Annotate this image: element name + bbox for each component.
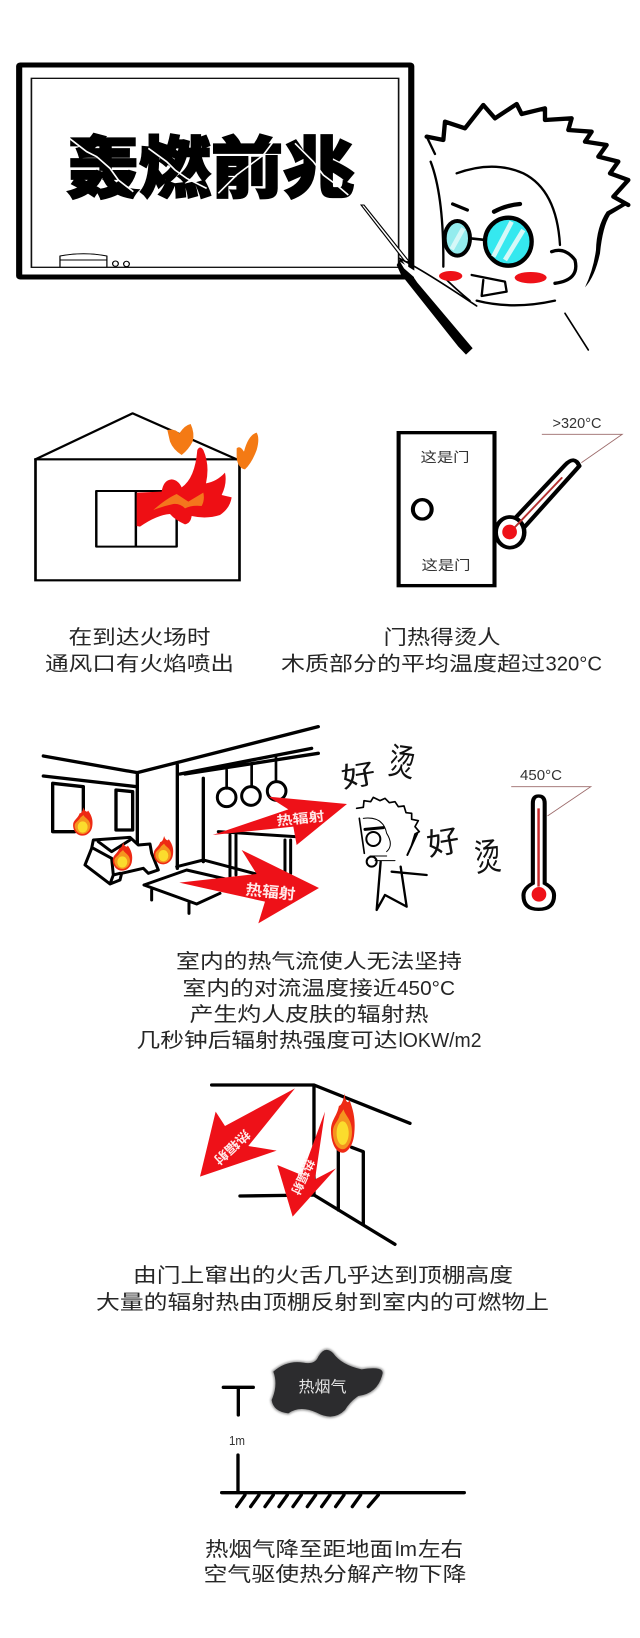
smoke diagram [222, 1350, 464, 1507]
smoke label: 热烟气 [298, 1378, 346, 1396]
door text: 这是门 [420, 449, 470, 465]
thermometer 320 [496, 434, 622, 548]
arrow label left: 热辐射 [210, 1127, 253, 1168]
caption: ceiling: 大量的辐射热由顶棚反射到室内的可燃物上 [96, 1291, 549, 1314]
blush [439, 271, 547, 283]
caption: door: 木质部分的平均温度超过 [281, 652, 545, 676]
arrow: reflected radiation right [277, 1112, 336, 1217]
orange flame top [167, 424, 193, 455]
arrow label lower: 热辐射 [245, 880, 296, 904]
arrow label right: 热辐射 [288, 1157, 318, 1197]
1m label: 1m [229, 1433, 245, 1448]
title: 轰燃前兆 [67, 132, 355, 207]
hair side [585, 202, 629, 287]
window [96, 491, 177, 547]
label >320C: >320°C [552, 416, 602, 432]
ground [222, 1493, 464, 1507]
house [35, 413, 239, 580]
caption: radiant heat: 产生灼人皮肤的辐射热 [190, 1003, 428, 1026]
hot exclamation top: 烫 [386, 740, 418, 785]
room on fire [43, 727, 347, 923]
orange flame right [237, 433, 258, 469]
caption: vents [45, 626, 234, 676]
ear [552, 250, 576, 283]
flame [154, 836, 173, 864]
hot exclamation bottom [424, 822, 503, 879]
flame [73, 807, 93, 836]
hot exclamation bottom: 好 [424, 822, 462, 863]
caption: smoke: 左右 [418, 1538, 463, 1561]
ceiling diagram [200, 1085, 410, 1244]
teacher character with pointer [397, 104, 629, 355]
arrow: reflected radiation left [200, 1088, 295, 1177]
flames from vent [137, 424, 258, 527]
red flame [137, 447, 232, 527]
thermometer 450 [511, 787, 591, 909]
caption: ceiling: 由门上窜出的火舌几乎达到顶棚高度 [133, 1264, 513, 1287]
stick person [357, 797, 427, 910]
sofa [85, 837, 158, 884]
caption: smoke: 空气驱使热分解产物下降 [204, 1563, 466, 1586]
hot exclamation top [339, 740, 418, 794]
caption: ceiling [96, 1264, 549, 1314]
arrow label upper: 热辐射 [276, 809, 325, 828]
caption: door: 门热得烫人 [384, 626, 500, 649]
caption: radiant heat: 室内的热气流使人无法坚持 [176, 950, 462, 973]
arrow: upper heat radiation [213, 797, 347, 845]
blackboard [19, 65, 411, 277]
neck line [565, 313, 588, 350]
hair [427, 104, 628, 205]
hot exclamation bottom: 烫 [472, 835, 503, 879]
caption: radiant heat: 室内的对流温度接近 [182, 977, 396, 1000]
smoke cloud [272, 1350, 383, 1417]
door text: 这是门 [422, 557, 470, 573]
caption: door [281, 626, 602, 676]
face outline [427, 137, 560, 305]
inner flame [153, 493, 204, 510]
arrow: lower heat radiation [179, 850, 319, 923]
label 450C: 450°C [520, 768, 562, 784]
caption: radiant heat: 450°C [397, 978, 455, 1000]
flame [113, 842, 132, 871]
caption: radiant heat [136, 950, 482, 1052]
door text [420, 449, 470, 573]
caption: radiant heat: 几秒钟后辐射热强度可达 [136, 1029, 398, 1052]
hot exclamation top: 好 [339, 757, 378, 794]
door [399, 433, 494, 586]
eyebrows [453, 204, 467, 210]
caption: smoke [204, 1538, 466, 1586]
teacher pointer tip [361, 205, 409, 262]
caption: vents: 在到达火场时 [68, 626, 210, 649]
arm and stick [397, 258, 477, 355]
height marker [223, 1387, 253, 1492]
mouth [472, 275, 507, 296]
caption: smoke: 热烟气降至距地面 [205, 1538, 393, 1561]
caption: smoke: lm [395, 1539, 417, 1561]
tables [144, 832, 295, 913]
caption: vents: 通风口有火焰喷出 [45, 652, 234, 676]
caption: door: 320°C [546, 654, 602, 676]
caption: radiant heat: lOKW/m2 [398, 1030, 482, 1052]
door flame [331, 1093, 355, 1153]
glasses [445, 218, 532, 266]
